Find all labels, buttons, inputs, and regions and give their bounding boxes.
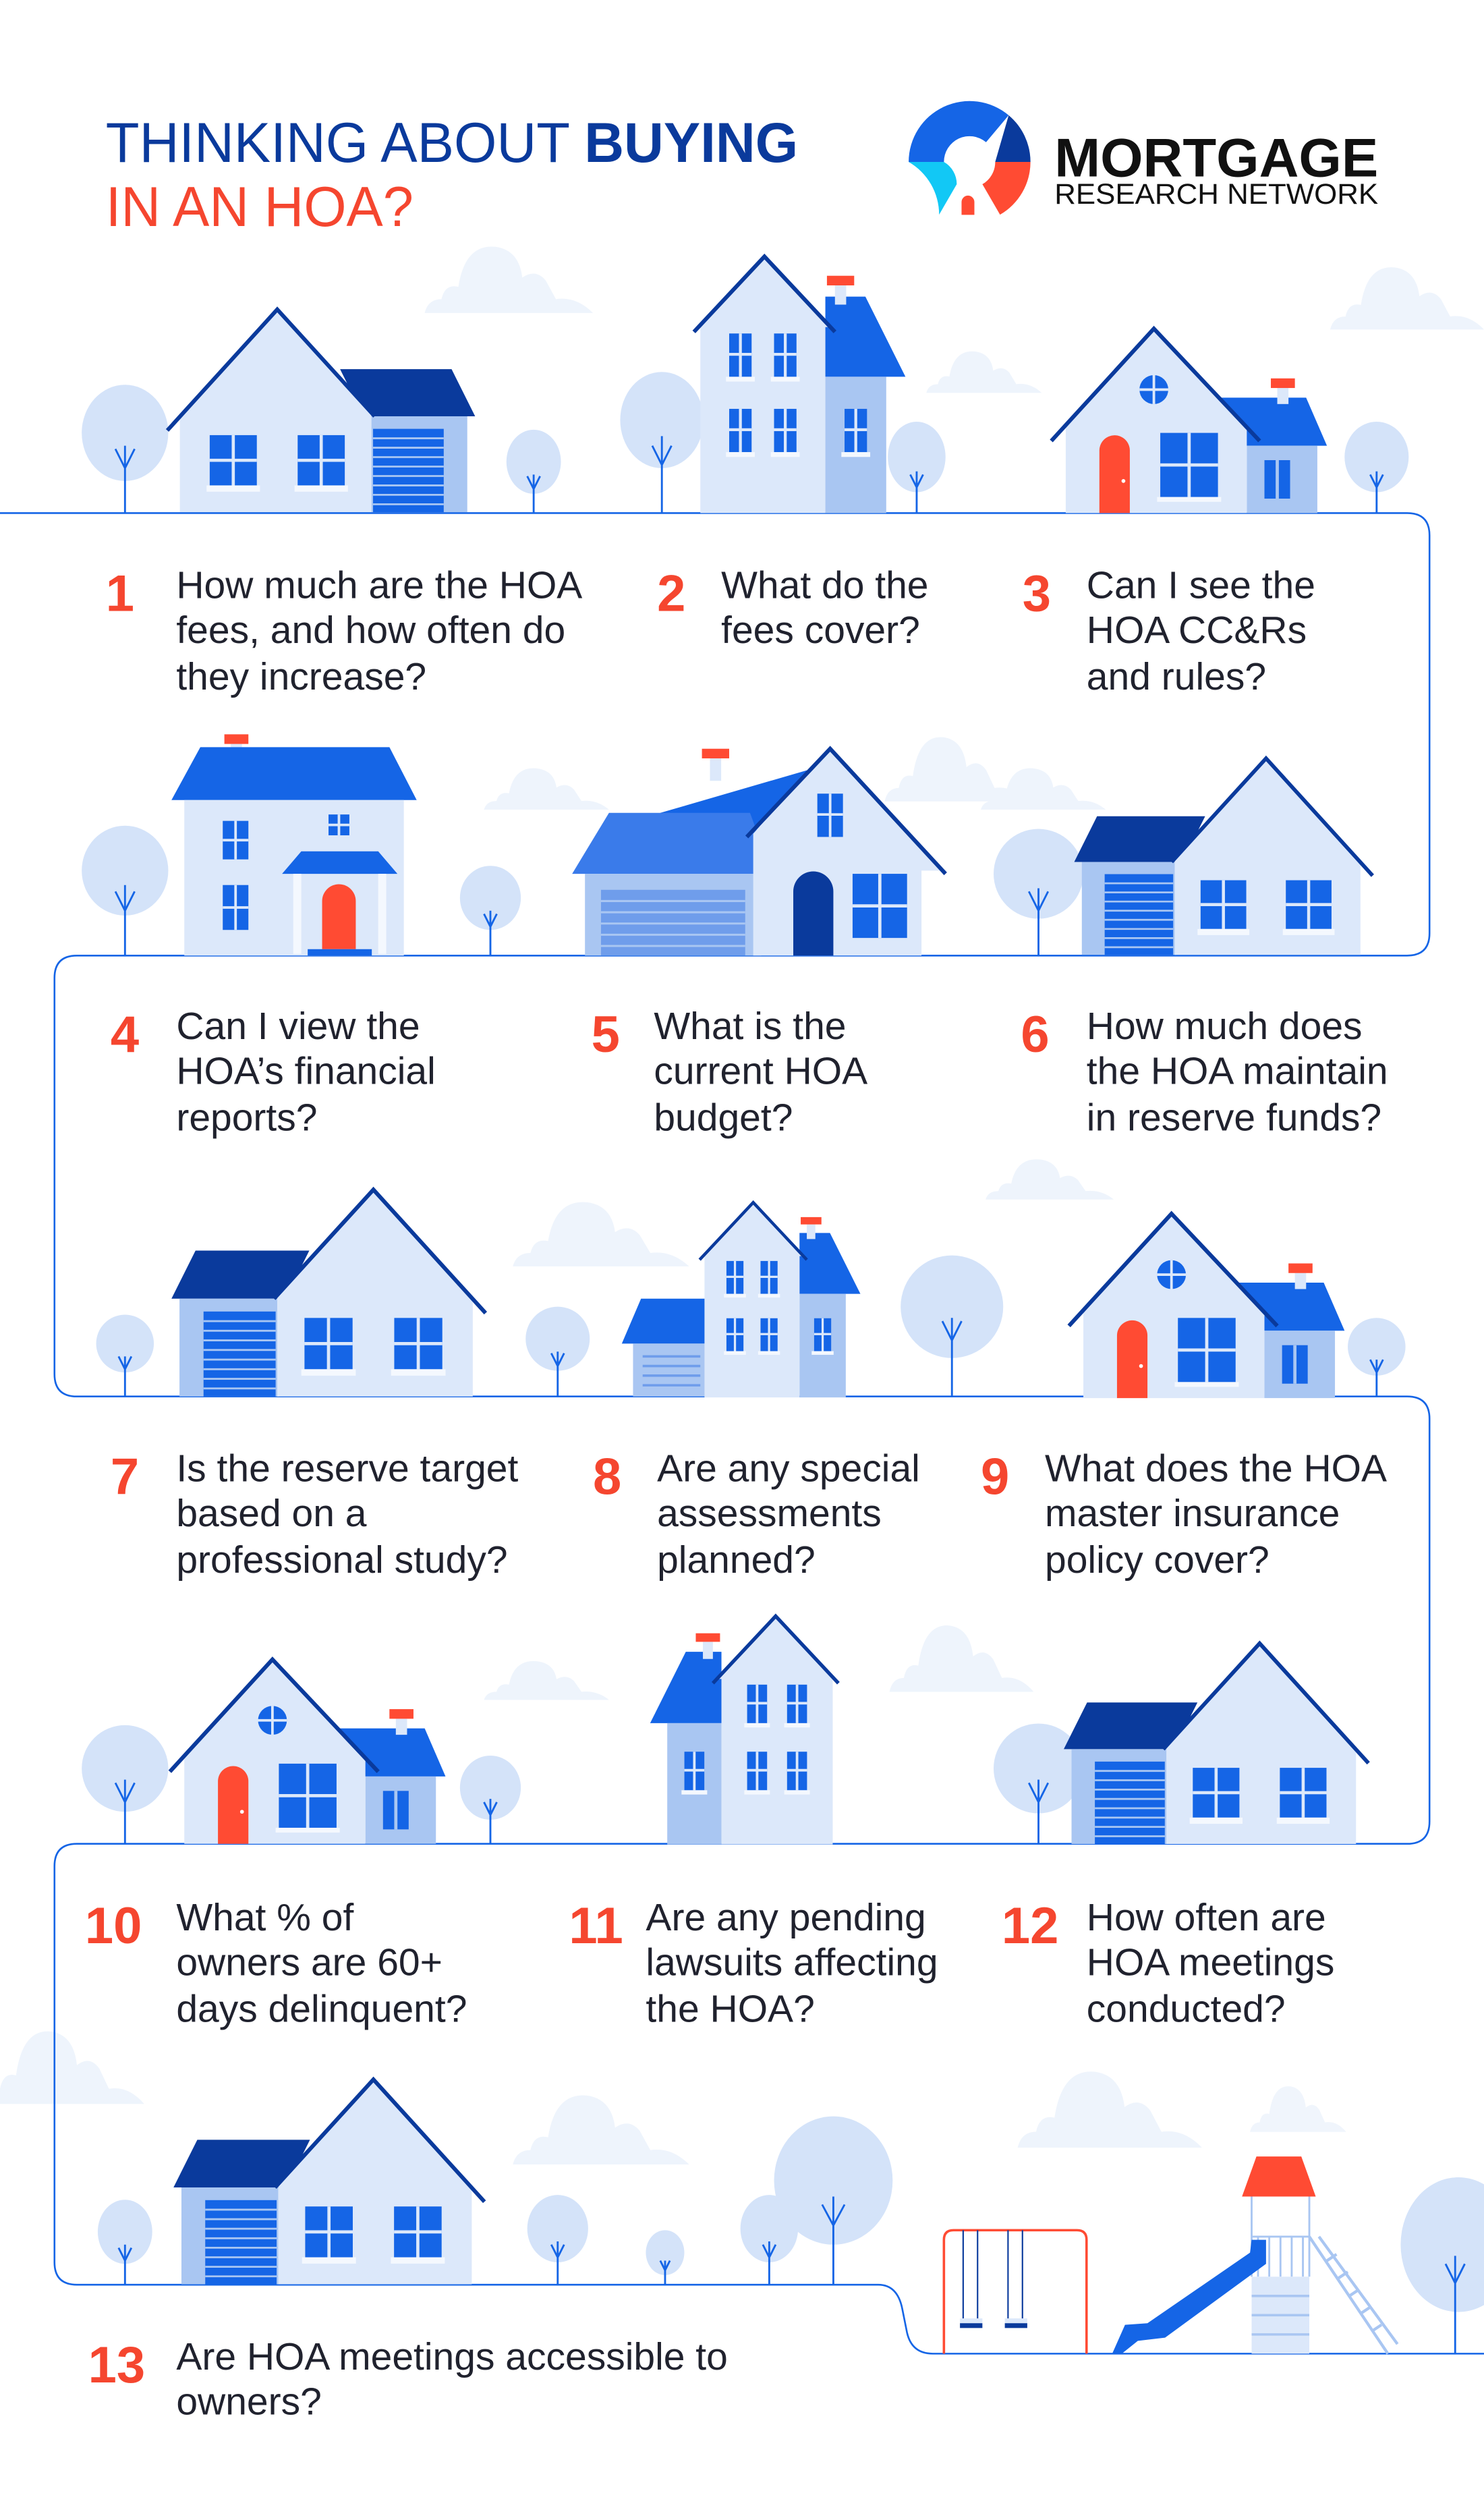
house 9 xyxy=(1069,1214,1344,1398)
question 7: 7 xyxy=(111,1449,139,1506)
house 5 xyxy=(572,749,946,955)
house 1 xyxy=(167,310,475,512)
question 1: 1 xyxy=(106,565,134,622)
question 10: What % of xyxy=(176,1896,353,1939)
logo xyxy=(909,101,1379,215)
question 4 xyxy=(111,1005,436,1139)
question 7: professional study? xyxy=(176,1538,508,1582)
question 4: reports? xyxy=(176,1096,317,1139)
question 2: 2 xyxy=(657,565,685,622)
trees xyxy=(82,372,1484,2353)
question 11: lawsuits affecting xyxy=(646,1941,938,1984)
question 9: master insurance xyxy=(1045,1492,1340,1535)
question 12: How often are xyxy=(1087,1896,1326,1939)
question 6: in reserve funds? xyxy=(1087,1096,1381,1139)
house 8 xyxy=(622,1202,861,1397)
question 6: How much does xyxy=(1087,1005,1363,1048)
question 10: owners are 60+ xyxy=(176,1941,443,1984)
question 9 xyxy=(981,1447,1387,1582)
question 5: current HOA xyxy=(654,1049,867,1092)
title: THINKING ABOUT BUYING xyxy=(106,111,798,174)
question 5: 5 xyxy=(592,1006,620,1063)
question 13: Are HOA meetings accessible to xyxy=(176,2335,728,2378)
house 13 xyxy=(173,2079,484,2285)
house 7 xyxy=(171,1190,486,1397)
question 12 xyxy=(1002,1896,1334,2030)
question 10: days delinquent? xyxy=(176,1987,467,2030)
question 13: 13 xyxy=(88,2337,145,2394)
question 5: budget? xyxy=(654,1096,793,1139)
clouds xyxy=(0,246,1484,2164)
question 2 xyxy=(657,563,929,652)
question 9: policy cover? xyxy=(1045,1538,1269,1582)
question 7: based on a xyxy=(176,1492,367,1535)
question 8: planned? xyxy=(657,1538,816,1582)
question 7 xyxy=(111,1447,518,1582)
question 4: 4 xyxy=(111,1006,139,1063)
question 10: 10 xyxy=(85,1897,142,1955)
title xyxy=(106,111,798,238)
house 2 xyxy=(694,256,905,513)
question 11: 11 xyxy=(569,1897,623,1955)
house 10 xyxy=(170,1659,445,1844)
question 5 xyxy=(592,1005,867,1139)
question 5: What is the xyxy=(654,1005,847,1048)
question 8: assessments xyxy=(657,1492,882,1535)
house 4 xyxy=(171,734,417,955)
playground: slide tower xyxy=(1112,2156,1398,2353)
question 12: 12 xyxy=(1002,1897,1058,1955)
question 12: conducted? xyxy=(1087,1987,1286,2030)
house 6 xyxy=(1075,758,1373,955)
question 8: 8 xyxy=(593,1449,621,1506)
house 12 xyxy=(1064,1644,1369,1844)
question 3: 3 xyxy=(1023,565,1051,622)
house 3 xyxy=(1052,329,1327,513)
question 6: the HOA maintain xyxy=(1087,1049,1388,1092)
path line xyxy=(0,513,1484,2353)
question 4: HOA’s financial xyxy=(176,1049,436,1092)
question 7: Is the reserve target xyxy=(176,1447,518,1490)
question 6: 6 xyxy=(1021,1006,1050,1063)
question 12: HOA meetings xyxy=(1087,1941,1334,1984)
question 2: fees cover? xyxy=(721,609,920,652)
question 8: Are any special xyxy=(657,1447,920,1490)
question 1: they increase? xyxy=(176,655,426,698)
question 11: Are any pending xyxy=(646,1896,926,1939)
question 3: and rules? xyxy=(1087,655,1266,698)
question 3: Can I see the xyxy=(1087,563,1315,607)
playground: swing xyxy=(944,2230,1087,2353)
question 9: What does the HOA xyxy=(1045,1447,1387,1490)
question 10 xyxy=(85,1896,467,2030)
question 11 xyxy=(569,1896,938,2030)
question 1: fees, and how often do xyxy=(176,609,565,652)
question 8 xyxy=(593,1447,920,1582)
question 1 xyxy=(106,563,582,698)
question 3 xyxy=(1023,563,1315,698)
question 2: What do the xyxy=(721,563,929,607)
house 11 xyxy=(650,1616,838,1845)
question 11: the HOA? xyxy=(646,1987,815,2030)
question 13 xyxy=(88,2335,728,2424)
logo: MORTGAGE xyxy=(1054,128,1378,188)
question 9: 9 xyxy=(981,1449,1009,1506)
question 3: HOA CC&Rs xyxy=(1087,609,1307,652)
logo: RESEARCH NETWORK xyxy=(1054,178,1379,211)
title: IN AN HOA? xyxy=(106,175,413,238)
question 4: Can I view the xyxy=(176,1005,420,1048)
question 6 xyxy=(1021,1005,1388,1139)
question 1: How much are the HOA xyxy=(176,563,582,607)
question 13: owners? xyxy=(176,2380,322,2424)
